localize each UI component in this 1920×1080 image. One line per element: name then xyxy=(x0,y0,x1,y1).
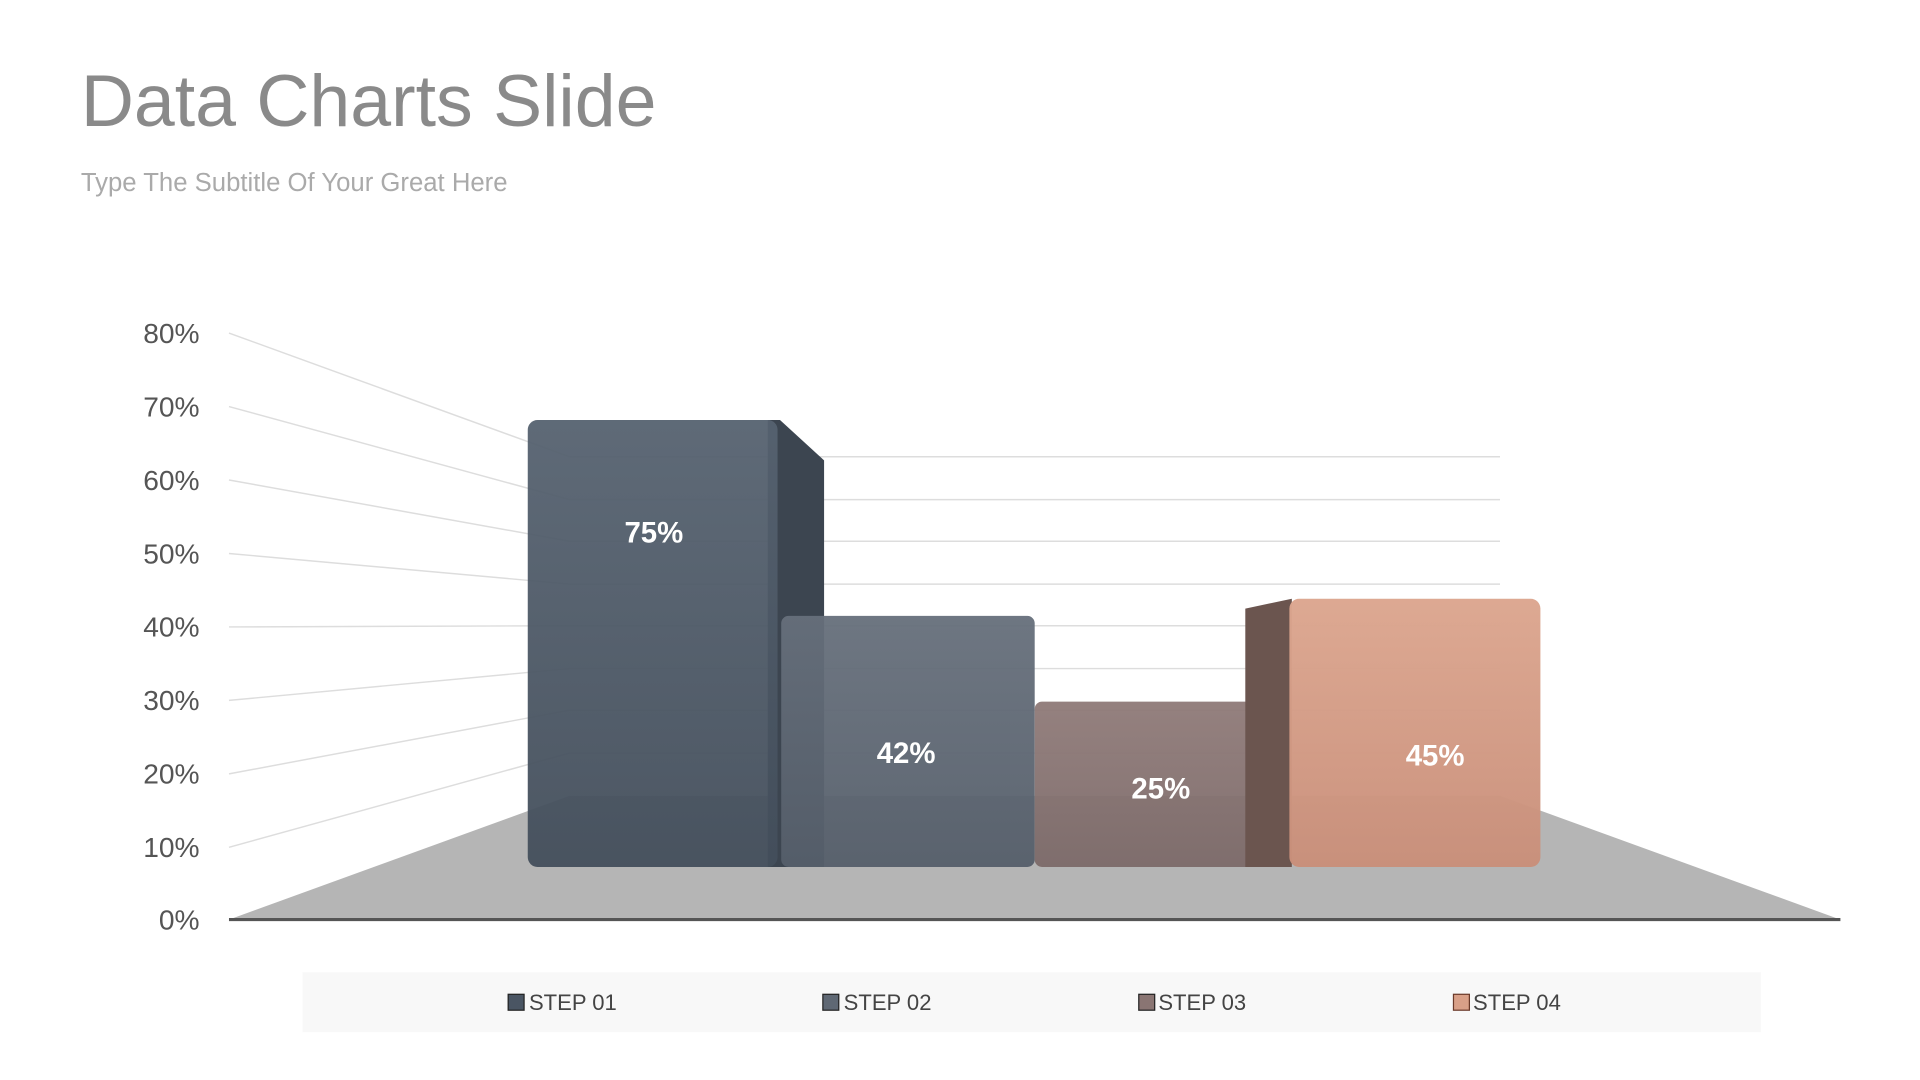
legend xyxy=(302,972,1761,1032)
legend: STEP 01 xyxy=(529,990,617,1015)
y axis labels: 60% xyxy=(143,465,200,496)
y axis labels: 70% xyxy=(143,391,200,422)
legend: STEP 03 xyxy=(1158,990,1246,1015)
y axis labels: 10% xyxy=(143,832,200,863)
y axis labels: 40% xyxy=(143,612,200,643)
legend: STEP 02 xyxy=(844,990,931,1015)
y axis labels: 0% xyxy=(159,904,200,935)
bar: step 02: 42% xyxy=(877,737,936,770)
bar: step 01: 75% xyxy=(624,516,683,549)
subtitle: Type The Subtitle Of Your Great Here xyxy=(81,169,508,197)
bar: step 04 xyxy=(1245,599,1540,867)
y axis labels: 20% xyxy=(143,759,200,790)
bar: step 01 xyxy=(528,420,824,867)
floor xyxy=(229,796,1840,920)
bar: step 04: 45% xyxy=(1406,739,1465,772)
bar: step 03 xyxy=(1035,702,1286,867)
y axis labels: 50% xyxy=(143,538,200,569)
legend: STEP 04 xyxy=(1473,990,1561,1015)
y axis labels: 80% xyxy=(143,318,200,349)
bar: step 03: 25% xyxy=(1131,772,1190,805)
chart xyxy=(143,318,1840,935)
title: Data Charts Slide xyxy=(81,59,656,142)
bar: step 02 xyxy=(781,616,1035,867)
y axis labels: 30% xyxy=(143,685,200,716)
y axis labels xyxy=(143,318,200,935)
